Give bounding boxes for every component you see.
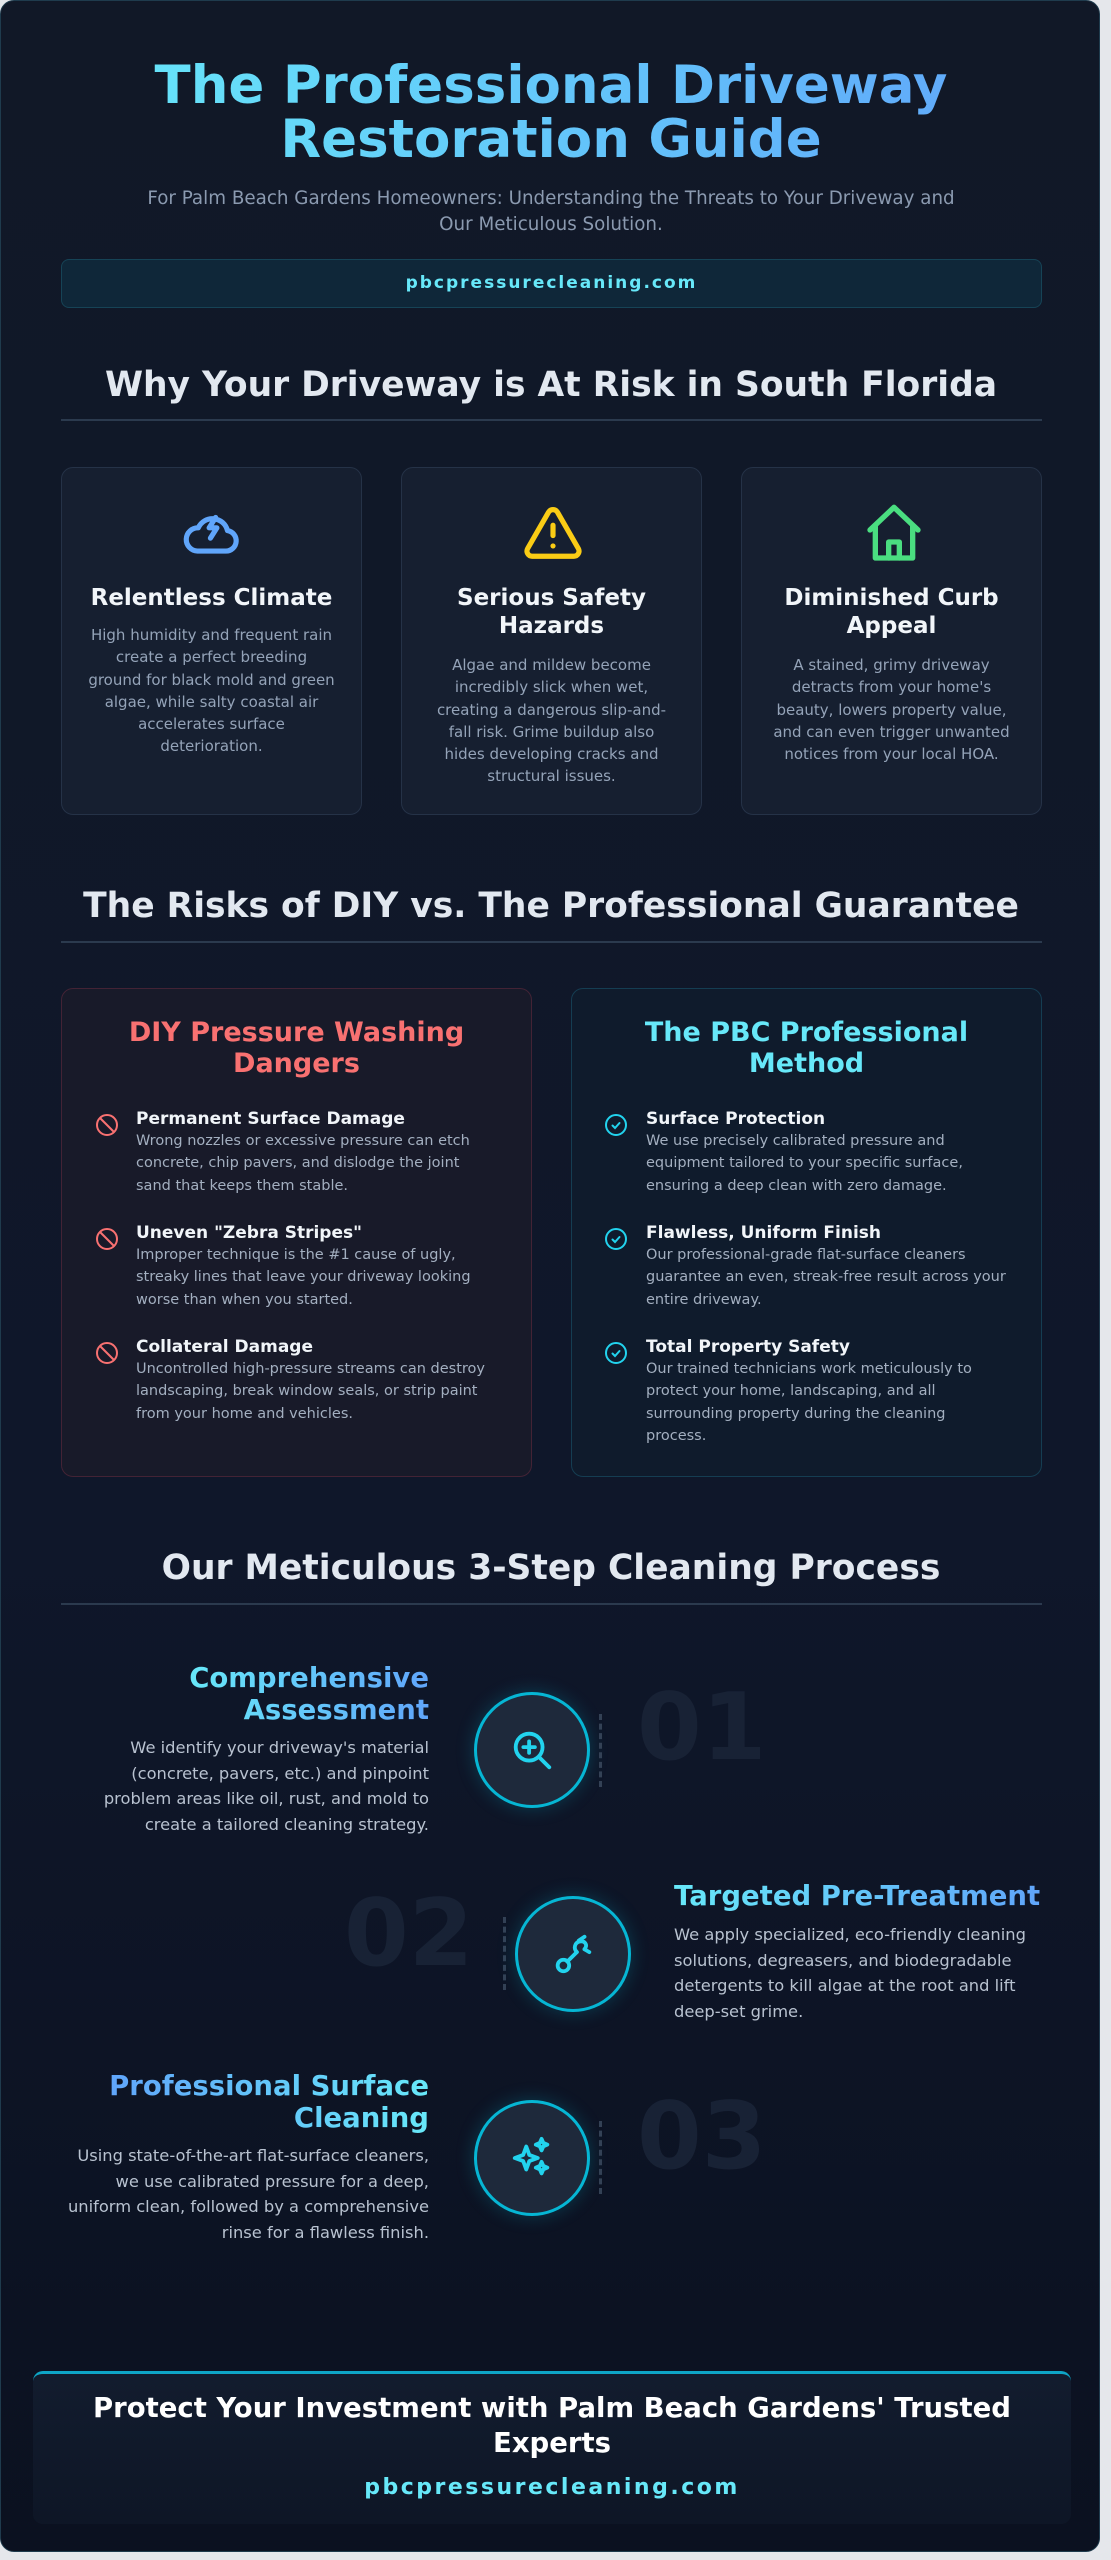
item: collateral damage: landscaping, break window seals, or strip paint [136,1383,478,1399]
number 03: 03 [637,2082,766,2190]
item: collateral damage: from your home and vehicles. [136,1406,353,1422]
icon: cloud lightning [184,514,239,554]
step 2 text: detergents to kill algae at the root and lift [674,1976,1016,1995]
number 01: 01 [637,1673,766,1781]
panel: pro method: Method [749,1048,864,1079]
step 2 text: solutions, degreasers, and biodegradable [674,1951,1012,1970]
card: relentless climate: deterioration. [160,737,263,755]
step 3 text: we use calibrated pressure for a deep, [116,2172,429,2190]
item: permanent damage [96,1109,470,1194]
card: curb appeal: Appeal [847,613,936,639]
item: uniform finish: entire driveway. [646,1292,762,1308]
card: curb appeal [741,467,1042,815]
card: safety hazards: incredibly slick when wet, [455,678,648,696]
item: uniform finish: Flawless, Uniform Finish [646,1223,881,1243]
card: relentless climate: create a perfect breeding [116,648,307,666]
step 3 text [68,2070,429,2242]
step 3 text: Professional Surface [109,2070,429,2102]
item: property safety: Our trained technicians work meticulously to [646,1361,972,1377]
item: permanent damage: Permanent Surface Damage [136,1109,405,1129]
item: zebra stripes: Uneven "Zebra Stripes" [136,1223,362,1243]
item: collateral damage: Uncontrolled high-pressure streams can destroy [136,1361,485,1377]
step 1 text: problem areas like oil, rust, and mold to [104,1789,429,1808]
item: collateral damage [96,1337,485,1422]
step 3 text: Cleaning [294,2102,429,2134]
icon: sparkles [474,2100,590,2216]
step 1 text [104,1662,429,1834]
icon: magnifier [474,1692,590,1808]
item: permanent damage: sand that keeps them stable. [136,1178,348,1194]
step 2 text [674,1880,1040,2021]
footer callout: Experts [493,2427,611,2459]
footer callout [33,2371,1071,2524]
step 1 text: Assessment [244,1694,429,1726]
step 3 text: uniform clean, followed by a comprehensive [68,2197,429,2216]
panel: DIY dangers [61,988,532,1477]
step 3 text: rinse for a flawless finish. [222,2222,429,2242]
subtitle: Our Meticulous Solution. [439,214,663,235]
icon: spray [515,1896,631,2012]
item: zebra stripes: Improper technique is the #1 cause of ugly, [136,1247,456,1263]
item: zebra stripes: streaky lines that leave your driveway looking [136,1269,471,1285]
panel: DIY dangers: DIY Pressure Washing [129,1017,464,1048]
card: safety hazards [401,467,702,815]
item: permanent damage: Wrong nozzles or excessive pressure can etch [136,1133,470,1149]
item: surface protection: We use precisely calibrated pressure and [646,1133,945,1149]
card: safety hazards: hides developing cracks and [444,745,659,763]
card: curb appeal: beauty, lowers property value, [776,701,1007,719]
panel: DIY dangers: Dangers [233,1048,360,1079]
item: surface protection: equipment tailored to your specific surface, [646,1155,963,1171]
step 2 text: deep-set grime. [674,2002,803,2021]
number 02: 02 [344,1879,473,1987]
step 1 text: Comprehensive [189,1662,429,1694]
card: curb appeal: Diminished Curb [784,585,999,611]
item: property safety: process. [646,1428,706,1444]
item: property safety: protect your home, landscaping, and all [646,1383,936,1399]
title: Restoration Guide [280,109,822,170]
card: relentless climate: algae, while salty coastal air [105,693,318,711]
step 1 text: We identify your driveway's material [130,1738,429,1757]
item: surface protection: ensuring a deep clean with zero damage. [646,1178,947,1194]
item: surface protection [605,1109,963,1194]
panel: pro method [571,988,1042,1477]
item: property safety: Total Property Safety [646,1337,850,1357]
card: safety hazards: structural issues. [487,767,616,785]
card: curb appeal: and can even trigger unwanted [773,723,1010,741]
item: uniform finish: guarantee an even, streak-free result across your [646,1269,1006,1285]
item: zebra stripes: worse than when you started. [136,1292,353,1308]
step 2 text: We apply specialized, eco-friendly cleaning [674,1925,1026,1944]
item: uniform finish: Our professional-grade flat-surface cleaners [646,1247,966,1263]
title [61,59,1041,167]
step 2 text: Targeted Pre-Treatment [674,1880,1040,1912]
card: safety hazards: Hazards [499,613,604,639]
item: collateral damage: Collateral Damage [136,1337,313,1357]
card: curb appeal: detracts from your home's [792,678,991,696]
card: curb appeal: A stained, grimy driveway [793,656,990,674]
card: safety hazards: Algae and mildew become [452,656,651,674]
card: curb appeal: notices from your local HOA. [784,745,999,763]
subtitle: For Palm Beach Gardens Homeowners: Understanding the Threats to Your Driveway and [147,188,955,209]
icon: warning triangle [524,507,582,559]
step 3 text: Using state-of-the-art flat-surface cleaners, [77,2146,429,2165]
card: relentless climate: Relentless Climate [91,585,332,611]
item: zebra stripes [96,1223,471,1308]
panel: pro method: The PBC Professional [645,1017,968,1048]
item: surface protection: Surface Protection [646,1109,825,1129]
item: property safety: surrounding property during the cleaning [646,1406,945,1422]
card: safety hazards: Serious Safety [457,585,646,611]
heading: why at risk: Why Your Driveway is At Risk in South Florida [105,365,997,405]
heading: 3-step process: Our Meticulous 3-Step Cleaning Process [162,1548,940,1588]
heading: DIY vs pro: The Risks of DIY vs. The Professional Guarantee [83,886,1019,926]
card: relentless climate: accelerates surface [138,715,285,733]
website banner: pbcpressurecleaning.com [406,273,697,293]
item: uniform finish [605,1223,1006,1308]
card: safety hazards: creating a dangerous slip-and- [437,701,666,719]
card: relentless climate: ground for black mold and green [88,671,335,689]
footer callout: Protect Your Investment with Palm Beach Gardens' Trusted [93,2392,1011,2424]
subtitle [147,188,955,235]
footer callout: pbcpressurecleaning.com [364,2475,740,2500]
item: permanent damage: concrete, chip pavers, and dislodge the joint [136,1155,459,1171]
item: property safety [605,1337,972,1444]
website banner [61,259,1042,308]
title: The Professional Driveway [155,55,947,116]
card: safety hazards: fall risk. Grime buildup also [449,723,654,741]
icon: house [867,504,921,561]
step 1 text: create a tailored cleaning strategy. [145,1815,429,1834]
step 1 text: (concrete, pavers, etc.) and pinpoint [131,1764,429,1783]
card: relentless climate: High humidity and frequent rain [91,626,332,644]
card: relentless climate [61,467,362,815]
